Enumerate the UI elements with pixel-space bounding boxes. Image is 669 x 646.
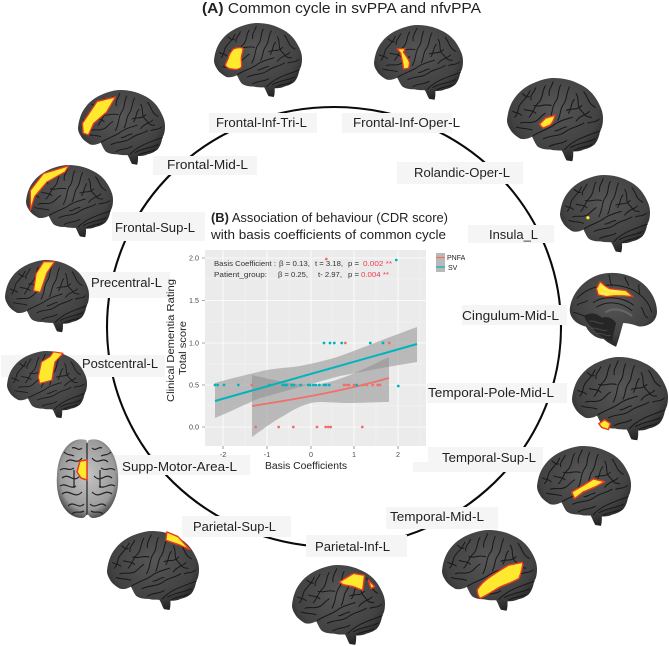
statistics annotation: p = — [348, 270, 359, 279]
label: Cingulum-Mid-L — [462, 305, 567, 325]
statistics annotation: p = — [348, 259, 359, 268]
x axis ticks: 1 — [352, 450, 356, 459]
scatter chart — [166, 250, 426, 472]
label: Insula_L: Insula_L — [489, 228, 538, 242]
label: Postcentral-L — [1, 355, 165, 377]
title A: (A) Common cycle in svPPA and nfvPPA — [202, 1, 481, 17]
statistics annotation: Basis Coefficient : — [214, 259, 276, 268]
label: Temporal-Sup-L — [413, 447, 543, 472]
label: Frontal-Inf-Tri-L: Frontal-Inf-Tri-L — [216, 116, 307, 130]
statistics annotation — [214, 259, 392, 279]
label: Frontal-Sup-L — [112, 212, 205, 241]
plot panel — [205, 250, 426, 446]
legend — [436, 253, 466, 272]
brain: Insula_L — [560, 175, 650, 252]
label: Rolandic-Oper-L: Rolandic-Oper-L — [414, 166, 510, 180]
y axis ticks: 1.0 — [189, 338, 199, 348]
brain: Frontal-Inf-Oper-L — [374, 25, 463, 100]
brain: Precentral-L — [5, 260, 89, 332]
label: Temporal-Pole-Mid-L: Temporal-Pole-Mid-L — [428, 386, 554, 400]
label: Temporal-Mid-L — [386, 507, 498, 529]
brain: Postcentral-L — [7, 351, 87, 418]
legend: PNFA — [447, 255, 466, 262]
label: Parietal-Sup-L: Parietal-Sup-L — [193, 520, 276, 534]
data points: 2.0 row — [325, 258, 398, 261]
statistics annotation: β = 0.13, — [279, 259, 310, 268]
label: Parietal-Sup-L — [182, 516, 291, 537]
statistics annotation: t- 2.97, — [318, 270, 342, 279]
brain: Cingulum-Mid-L medial view — [570, 273, 657, 347]
label: Frontal-Mid-L — [153, 156, 257, 175]
y axis title — [166, 279, 189, 402]
data points: 0.5 row — [214, 384, 400, 387]
label: Frontal-Mid-L: Frontal-Mid-L — [167, 158, 248, 172]
label: Precentral-L — [77, 272, 170, 298]
y axis title: Clinical Dementia Rating — [166, 279, 177, 402]
regression line: PNFA — [252, 378, 389, 406]
confidence ribbon: PNFA — [252, 357, 389, 437]
statistics annotation: 0.004 ** — [361, 270, 389, 279]
confidence ribbon: SV — [215, 327, 417, 418]
x axis ticks: 2 — [396, 450, 400, 459]
label: Frontal-Sup-L: Frontal-Sup-L — [115, 221, 195, 235]
x axis title: Basis Coefficients — [265, 461, 347, 472]
y axis ticks: 1.5 — [189, 296, 199, 305]
heading B — [210, 211, 448, 242]
label: Precentral-L: Precentral-L — [91, 276, 162, 290]
y axis ticks — [189, 254, 398, 449]
brain: Temporal-Sup-L — [537, 446, 631, 526]
brain: Supp-Motor-Area-L top view — [57, 439, 118, 518]
label: Postcentral-L: Postcentral-L — [82, 357, 158, 371]
x axis ticks: -2 — [220, 450, 226, 459]
x axis ticks: 0 — [309, 450, 313, 459]
y axis ticks: 2.0 — [189, 254, 199, 262]
label: Temporal-Sup-L: Temporal-Sup-L — [442, 451, 536, 465]
label: Frontal-Inf-Oper-L: Frontal-Inf-Oper-L — [353, 116, 460, 130]
brain: Parietal-Inf-L — [292, 565, 385, 645]
statistics annotation: β = 0.25, — [278, 270, 308, 279]
label: Cingulum-Mid-L: Cingulum-Mid-L — [462, 309, 559, 323]
heading B: (B) Association of behaviour (CDR score) — [211, 211, 448, 225]
brain: Frontal-Mid-L — [78, 90, 165, 165]
label: Parietal-Inf-L: Parietal-Inf-L — [315, 540, 390, 554]
x axis ticks: -1 — [264, 450, 270, 459]
cycle ring connecting regions — [107, 107, 561, 547]
label: Insula_L — [468, 225, 554, 243]
x axis ticks — [220, 450, 400, 459]
label: Supp-Motor-Area-L — [113, 455, 250, 475]
brain: Rolandic-Oper-L — [507, 78, 603, 161]
statistics annotation: 0.002 ** — [363, 259, 392, 268]
statistics annotation: t = 3.18, — [315, 259, 343, 268]
legend: SV — [448, 265, 458, 272]
label: Rolandic-Oper-L — [397, 162, 523, 184]
y axis ticks: 0.0 — [189, 422, 199, 432]
label: Frontal-Inf-Oper-L — [342, 113, 460, 133]
label: Frontal-Inf-Tri-L — [209, 113, 317, 133]
brain: Temporal-Mid-L — [442, 530, 537, 611]
brain: Temporal-Pole-Mid-L — [572, 357, 668, 440]
data points: 0 row — [254, 426, 364, 428]
label: Supp-Motor-Area-L: Supp-Motor-Area-L — [122, 460, 237, 474]
statistics annotation: Patient_group: — [214, 270, 267, 279]
brain: Parietal-Sup-L — [107, 531, 199, 610]
brain: Frontal-Sup-L — [26, 165, 113, 237]
y axis title: Total score — [178, 321, 189, 375]
label: Parietal-Inf-L — [306, 535, 407, 557]
brain: Frontal-Inf-Tri-L — [214, 23, 302, 97]
label: Temporal-Pole-Mid-L — [427, 383, 567, 403]
data points: 1.0 row — [323, 342, 391, 344]
label: Temporal-Mid-L: Temporal-Mid-L — [390, 510, 484, 524]
y axis ticks: 0.5 — [189, 380, 199, 390]
regression line: SV — [215, 344, 417, 401]
heading B: with basis coefficients of common cycle — [210, 228, 446, 242]
